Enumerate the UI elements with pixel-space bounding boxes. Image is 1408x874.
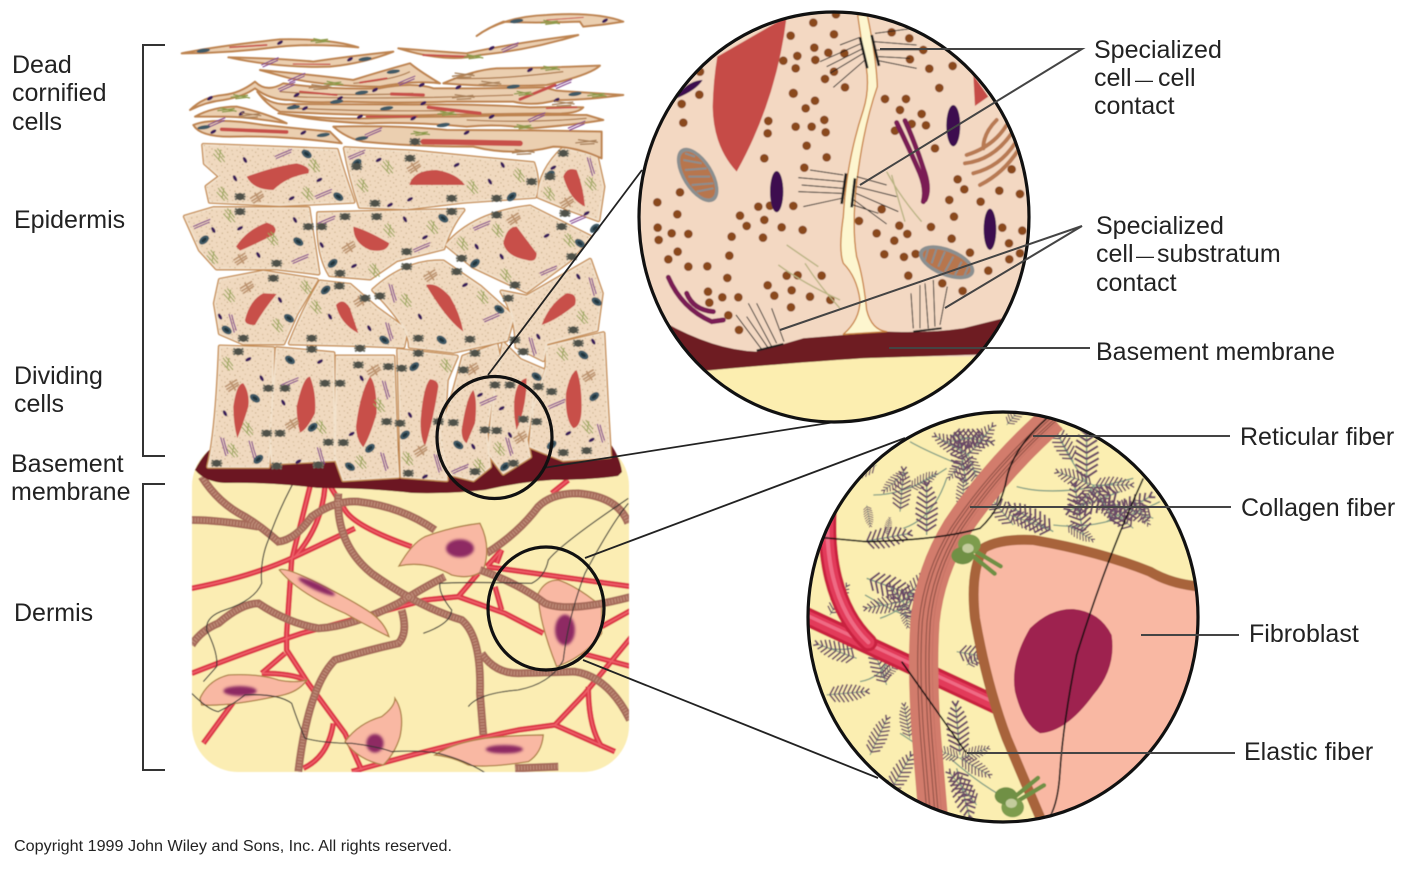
magnifier circle: dermis [488,547,604,670]
label: specialized cell-cell contact: — [1135,70,1153,90]
cell-substratum junction filaments [736,280,947,351]
label: specialized cell-cell contact: cell [1094,64,1132,92]
label: fibroblast: Fibroblast [1249,620,1359,648]
bracket: epidermis [143,45,165,456]
leader lines to labels [780,49,1239,753]
label: specialized cell-cell contact: cell [1158,64,1196,92]
cell-cell junction filaments [798,28,920,224]
intercellular gap [841,15,887,334]
label: basement membrane left: membrane [11,478,130,506]
tonofilaments [778,172,922,308]
granules [653,10,1026,334]
panel: magnified epidermis cell contacts [630,0,1040,433]
basement membrane band [195,438,622,493]
blood vessel [803,502,1000,707]
dark granules and endoplasmic reticulum [668,80,996,322]
label: basement membrane left: Basement [11,450,124,478]
panel: full skin cross-section [182,14,632,773]
label: dermis: Dermis [14,599,93,627]
callout lines from small circles to magnified views [488,170,905,778]
label: reticular fiber: Reticular fiber [1240,423,1394,451]
label: specialized cell-cell contact: Specialized [1094,36,1222,64]
nucleus [713,17,988,172]
Golgi apparatus [965,120,1018,185]
label: specialized cell-substratum contact: cell [1096,240,1134,268]
elastic fibers [811,396,1160,824]
epidermis cells [182,14,623,480]
label: dividing cells: Dividing [14,362,103,390]
integrin receptor bottom [995,778,1044,817]
fibroblast nucleus [1014,609,1113,733]
reticular fibers [823,418,1143,817]
magnifier circle: epidermis [437,376,552,498]
fibroblast cell [974,540,1210,825]
label: specialized cell-substratum contact: substratum [1157,240,1281,268]
flattened nuclei [222,17,583,143]
label: collagen fiber: Collagen fiber [1241,494,1395,522]
mitochondria [668,141,979,286]
label: elastic fiber: Elastic fiber [1244,738,1373,766]
label: basement membrane right: Basement membrane [1096,338,1335,366]
integrin receptor top [951,534,1001,574]
bracket: dermis [143,484,165,770]
dead cornified cells [182,14,623,158]
label: specialized cell-substratum contact: contact [1096,269,1177,297]
label: dead cornified cells: cells [12,108,62,136]
cell nuclei [233,163,585,447]
label: epidermis: Epidermis [14,206,125,234]
copyright: Copyright 1999 John Wiley and Sons, Inc. All rights reserved. [14,838,452,855]
label: specialized cell-cell contact: contact [1094,92,1175,120]
organelles: mitochondria, granules, desmosomes [197,138,603,480]
label: dead cornified cells: Dead [12,51,72,79]
cytoplasmic filaments [193,148,605,474]
collagen fiber [918,418,1062,818]
label: dividing cells: cells [14,390,64,418]
cornified cell remnants [196,18,609,154]
panel: magnified dermis fibroblast and fibers [800,396,1210,830]
label: dead cornified cells: cornified [12,79,106,107]
dermis connective tissue [192,440,632,773]
label: specialized cell-substratum contact: — [1136,246,1154,266]
basement membrane and connective tissue [670,318,1002,420]
label: specialized cell-substratum contact: Specialized [1096,212,1224,240]
